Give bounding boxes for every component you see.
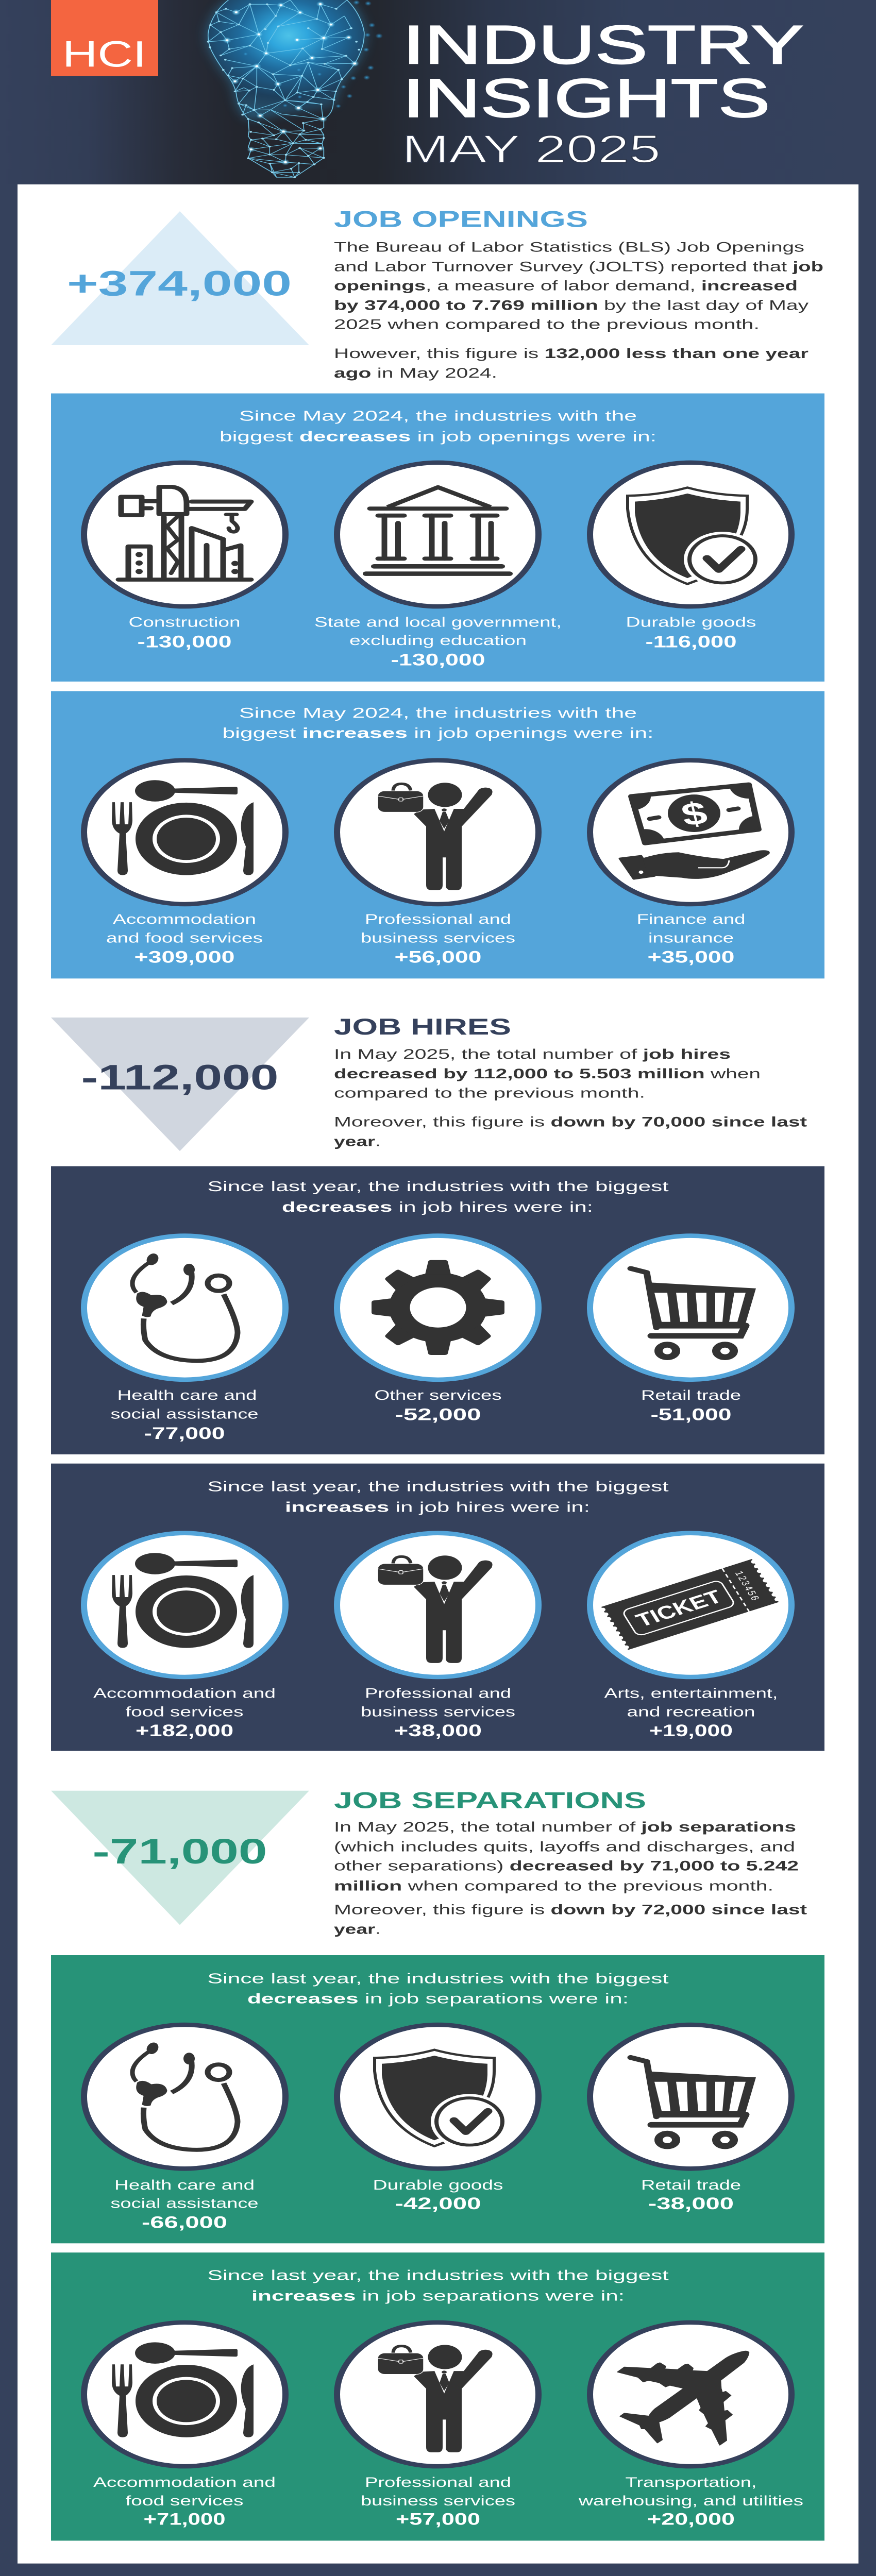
icon: stethoscope [84, 1236, 285, 1380]
text block: job separations summary: year. [334, 1921, 381, 1937]
text block: job hires summary: Moreover, this figure is down by 70,000 since last [334, 1114, 807, 1129]
label: health care and social assistance: -77,000 [144, 1424, 225, 1443]
label: professional and business services: +38,000 [394, 1721, 482, 1740]
label: durable goods: Durable goods [373, 2177, 503, 2193]
label: accommodation and food services: food services [126, 2493, 243, 2509]
panel heading [208, 1971, 669, 2007]
panel: job openings decreases [51, 394, 824, 682]
panel: job openings increases [51, 691, 824, 978]
label: accommodation and food services [93, 1685, 276, 1740]
label: health care and social assistance [111, 2177, 259, 2232]
icon: business person [337, 1533, 538, 1677]
label: professional and business services: +56,000 [395, 948, 482, 967]
heading: job openings: JOB OPENINGS [334, 207, 588, 232]
label: accommodation and food services: and food services [106, 930, 263, 945]
label: professional and business services: +57,000 [396, 2510, 480, 2529]
triangle stat: +374,000: +374,000 [67, 263, 292, 303]
label: accommodation and food services: Accommodation [113, 911, 256, 927]
title: MAY 2025 [402, 127, 661, 171]
label: professional and business services [361, 2474, 515, 2529]
header banner [0, 0, 876, 184]
panel heading: decreases in job separations were in: [247, 1991, 629, 2007]
text block: job openings summary: ago in May 2024. [334, 365, 497, 381]
logo: HCI [51, 0, 158, 76]
text block: job openings summary: However, this figure is 132,000 less than one year [334, 345, 808, 361]
label: transportation, warehousing, and utilities [578, 2474, 803, 2529]
label: accommodation and food services: +182,000 [136, 1721, 233, 1740]
text block: job separations summary: Moreover, this figure is down by 72,000 since last [334, 1902, 807, 1917]
icon: money in hand: $ [678, 794, 711, 833]
triangle stat: -71,000 [51, 1791, 309, 1925]
label: accommodation and food services: +309,000 [134, 948, 234, 967]
label: professional and business services: business services [361, 1704, 515, 1719]
text block: job separations summary: other separations) decreased by 71,000 to 5.242 [334, 1858, 799, 1873]
panel heading [208, 1178, 669, 1215]
icon: place setting [84, 1533, 285, 1677]
icon: shopping cart [590, 2025, 791, 2168]
label: professional and business services: business services [361, 930, 515, 945]
logo: HCI: HCI [62, 33, 146, 75]
icon: ticket: 123456 [733, 1569, 763, 1603]
icon: business person [337, 2323, 538, 2466]
panel heading [208, 2267, 669, 2304]
triangle stat: -112,000 [51, 1018, 309, 1151]
panel heading [208, 1479, 669, 1515]
label: accommodation and food services [93, 2474, 276, 2529]
icon: gear [337, 1236, 538, 1380]
text block: job openings summary: The Bureau of Labor Statistics (BLS) Job Openings [334, 239, 804, 255]
label: transportation, warehousing, and utilities: Transportation, [626, 2474, 757, 2490]
label: professional and business services: Professional and [365, 2474, 511, 2490]
icon: place setting [84, 760, 285, 904]
label: arts, entertainment, and recreation: and recreation [627, 1704, 755, 1719]
icon: business person [337, 760, 538, 904]
text block: job separations summary: million when compared to the previous month. [334, 1878, 773, 1893]
label: finance and insurance: +35,000 [647, 948, 734, 967]
panel heading: Since May 2024, the industries with the [239, 705, 637, 721]
label: retail trade [641, 2177, 741, 2213]
label: finance and insurance [637, 911, 745, 967]
label: durable goods: Durable goods [626, 614, 756, 630]
title [402, 15, 803, 171]
icon: stethoscope [84, 2025, 285, 2168]
label: durable goods: -116,000 [645, 633, 737, 651]
text block: job openings summary [334, 239, 823, 381]
label: retail trade: -51,000 [651, 1405, 732, 1424]
text block: job separations summary: In May 2025, the total number of job separations [334, 1819, 796, 1835]
text block: job openings summary: by 374,000 to 7.769 million by the last day of May [334, 297, 809, 313]
label: professional and business services: Professional and [365, 1685, 511, 1701]
label: retail trade [641, 1387, 741, 1424]
text block: job hires summary: year. [334, 1133, 381, 1149]
label: other services: Other services [374, 1387, 502, 1403]
triangle stat: -112,000: -112,000 [81, 1057, 278, 1097]
text block: job openings summary: 2025 when compared to the previous month. [334, 316, 760, 332]
label: state and local government: -130,000 [391, 651, 485, 669]
icon: ticket: TICKET [632, 1586, 726, 1631]
section: job hires [51, 1014, 807, 1151]
panel heading: biggest decreases in job openings were in: [220, 429, 656, 445]
label: transportation, warehousing, and utilities: +20,000 [647, 2510, 735, 2529]
section: job separations [51, 1788, 807, 1937]
label: finance and insurance: Finance and [637, 911, 745, 927]
label: accommodation and food services: Accommodation and [93, 2474, 276, 2490]
title: INDUSTRY [402, 15, 803, 75]
label: state and local government [314, 614, 562, 669]
panel heading [223, 705, 653, 741]
label: arts, entertainment, and recreation [604, 1685, 778, 1740]
text block: job hires summary: decreased by 112,000 to 5.503 million when [334, 1065, 761, 1081]
text block: job openings summary: openings, a measure of labor demand, increased [334, 278, 798, 293]
panel heading: Since May 2024, the industries with the [239, 408, 637, 424]
icon: durable goods shield [590, 463, 791, 606]
panel heading: Since last year, the industries with the biggest [208, 1971, 669, 1987]
panel: job separations decreases [51, 1955, 824, 2243]
icon: airplane [590, 2323, 791, 2466]
panel heading: increases in job separations were in: [251, 2288, 625, 2304]
label: health care and social assistance: social assistance [111, 1406, 258, 1421]
icon: government building [337, 463, 538, 606]
icon: construction crane [84, 463, 285, 606]
label: accommodation and food services: +71,000 [143, 2510, 225, 2529]
panel heading [220, 408, 656, 445]
label: professional and business services [361, 1685, 515, 1740]
label: state and local government: State and local government, [314, 614, 562, 630]
label: state and local government: excluding education [349, 632, 527, 648]
icon: ticket [590, 1533, 791, 1677]
label: professional and business services [361, 911, 515, 967]
label: arts, entertainment, and recreation: Arts, entertainment, [604, 1685, 778, 1701]
triangle stat: -71,000: -71,000 [93, 1832, 267, 1871]
heading: job separations: JOB SEPARATIONS [334, 1788, 646, 1813]
text block: job hires summary: In May 2025, the total number of job hires [334, 1046, 731, 1062]
label: health care and social assistance: Health care and [117, 1387, 257, 1403]
label: health care and social assistance: social assistance [111, 2195, 258, 2211]
panel heading: Since last year, the industries with the biggest [208, 2267, 669, 2283]
label: durable goods [626, 614, 756, 651]
panel heading: decreases in job hires were in: [282, 1199, 593, 1215]
label: accommodation and food services [106, 911, 263, 967]
label: transportation, warehousing, and utilities: warehousing, and utilities [578, 2493, 803, 2509]
label: construction: -130,000 [137, 633, 232, 651]
label: durable goods [373, 2177, 503, 2213]
title: INSIGHTS [402, 68, 770, 129]
label: health care and social assistance: Health care and [114, 2177, 255, 2193]
label: arts, entertainment, and recreation: +19,000 [649, 1721, 733, 1740]
panel heading: Since last year, the industries with the biggest [208, 1178, 669, 1195]
label: durable goods: -42,000 [395, 2194, 481, 2213]
panel heading: biggest increases in job openings were in: [223, 725, 653, 741]
label: other services [374, 1387, 502, 1424]
icon: durable goods shield [337, 2025, 538, 2168]
label: other services: -52,000 [395, 1405, 481, 1424]
label: accommodation and food services: Accommodation and [93, 1685, 276, 1701]
text block: job openings summary: and Labor Turnover Survey (JOLTS) reported that job [334, 259, 823, 274]
panel: job separations increases [51, 2252, 824, 2540]
label: retail trade: -38,000 [648, 2194, 734, 2213]
label: health care and social assistance [111, 1387, 259, 1443]
icon: money in hand [590, 760, 791, 904]
label: construction: Construction [129, 614, 240, 630]
icon: place setting [84, 2323, 285, 2466]
label: health care and social assistance: -66,000 [142, 2213, 227, 2232]
panel: job hires increases [51, 1464, 824, 1751]
heading: job hires: JOB HIRES [334, 1014, 511, 1040]
text block: job hires summary: compared to the previous month. [334, 1085, 645, 1100]
section: job openings [51, 207, 823, 381]
icon: network lightbulb [207, 0, 383, 178]
label: professional and business services: Professional and [365, 911, 511, 927]
triangle stat: +374,000 [51, 211, 309, 345]
label: finance and insurance: insurance [648, 930, 734, 945]
icon: shopping cart [590, 1236, 791, 1380]
label: professional and business services: business services [361, 2493, 515, 2509]
label: retail trade: Retail trade [641, 2177, 741, 2193]
label: construction [129, 614, 240, 651]
text block: job hires summary [334, 1046, 807, 1149]
label: accommodation and food services: food services [126, 1704, 243, 1719]
panel heading: increases in job hires were in: [285, 1499, 590, 1515]
panel heading: Since last year, the industries with the biggest [208, 1479, 669, 1495]
text block: job separations summary [334, 1819, 807, 1937]
label: retail trade: Retail trade [641, 1387, 741, 1403]
panel: job hires decreases [51, 1166, 824, 1454]
text block: job separations summary: (which includes quits, layoffs and discharges, and [334, 1839, 795, 1854]
